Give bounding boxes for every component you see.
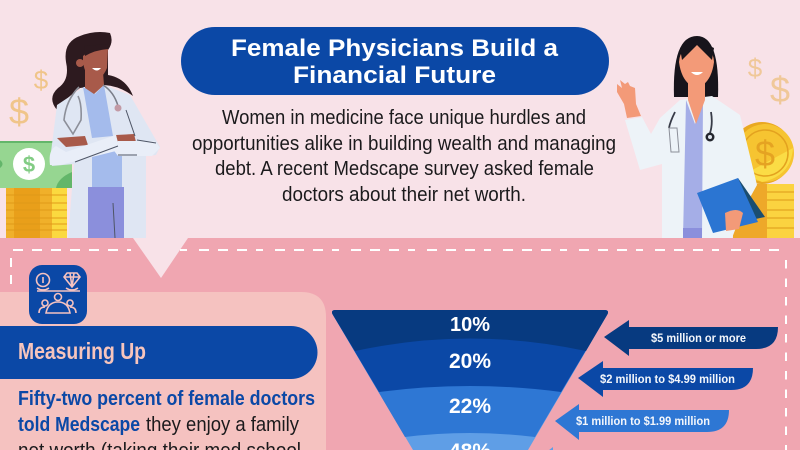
funnel chart	[332, 310, 608, 450]
funnel chart: 20%	[449, 350, 491, 373]
icon: scales with coin, diamond and people	[29, 265, 87, 324]
body text: Fifty-two percent of female doctors	[18, 388, 315, 410]
stethoscope	[64, 87, 81, 134]
dollar signs left: $	[9, 91, 29, 132]
body text: told Medscape	[18, 414, 140, 436]
clipboard	[738, 178, 765, 222]
dollar signs left: $	[34, 65, 49, 95]
coat	[50, 85, 160, 238]
dollar signs left	[9, 65, 49, 132]
stethoscope	[669, 112, 712, 133]
dollar signs right: $	[770, 69, 790, 110]
intro text: debt. A recent Medscape survey asked female	[215, 157, 594, 180]
title: Financial Future	[293, 62, 496, 89]
body text: they enjoy a family	[146, 414, 299, 436]
arrow: $2 million to $4.99 million: $2 million to $4.99 million	[600, 374, 735, 386]
intro text	[192, 106, 616, 206]
hair	[52, 32, 133, 110]
illustration: doctor with crossed arms	[50, 32, 160, 238]
waving hand	[617, 80, 641, 118]
hair	[674, 36, 718, 97]
funnel chart: 10%	[450, 314, 490, 336]
heading bar: Measuring Up	[0, 326, 318, 379]
coin and stack: $	[755, 133, 775, 174]
intro text: Women in medicine face unique hurdles and	[222, 106, 586, 129]
arrow: $2 million to $4.99 million	[578, 361, 753, 397]
intro text: opportunities alike in building wealth and managing	[192, 132, 616, 155]
funnel chart: 22%	[449, 395, 491, 418]
face	[85, 70, 104, 94]
dollar signs right	[748, 53, 790, 110]
dollar signs right: $	[748, 53, 763, 83]
coat	[625, 96, 757, 238]
arrow: $1 million to $1.99 million	[555, 404, 729, 440]
scrubs	[683, 100, 703, 238]
illustration: doctor waving with clipboard	[617, 36, 794, 238]
panel: lower section background	[0, 238, 800, 450]
title	[181, 27, 609, 95]
panel: measuring up	[0, 265, 326, 450]
arms	[57, 136, 88, 147]
arrow: $5 million or more: $5 million or more	[651, 333, 746, 345]
icon: banknote and coin stack: $	[23, 152, 35, 177]
arrow: $5 million or more	[604, 320, 778, 356]
face	[688, 80, 705, 124]
intro text: doctors about their net worth.	[282, 183, 526, 206]
title: Female Physicians Build a	[231, 35, 559, 62]
icon: banknote and coin stack	[0, 141, 72, 238]
arrow: fourth tier	[530, 447, 700, 450]
scrubs	[83, 85, 113, 138]
callout pointer	[133, 238, 188, 278]
coin and stack	[731, 122, 794, 238]
arrow: $1 million to $1.99 million: $1 million to $1.99 million	[576, 416, 710, 428]
heading bar: Measuring Up: Measuring Up	[18, 338, 146, 364]
body text	[18, 388, 315, 450]
